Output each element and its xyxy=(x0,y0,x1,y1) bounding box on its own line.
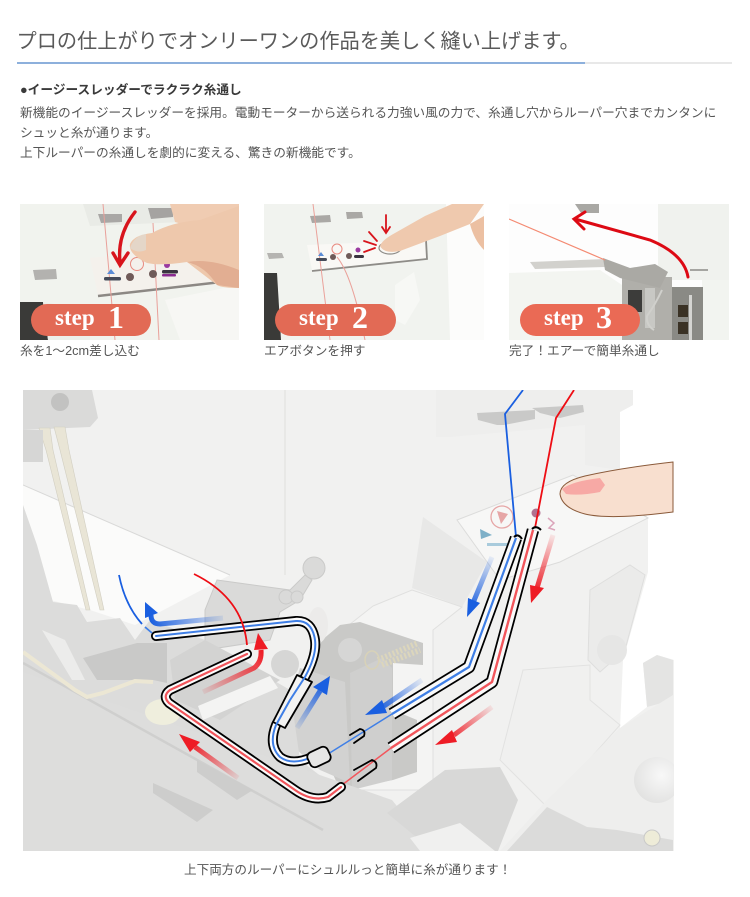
white housing xyxy=(330,590,462,790)
hand xyxy=(380,204,484,252)
flow arrows xyxy=(145,535,553,778)
lower right casting xyxy=(643,655,673,707)
red press marks xyxy=(364,215,390,252)
lower casting xyxy=(387,767,518,851)
photo: step 3 xyxy=(509,204,729,340)
intro body text: 新機能のイージースレッダーを採用。電動モーターから送られる力強い風の力で、糸通し穴からルーパー穴までカンタンに xyxy=(20,106,716,120)
step 2 badge: 2 xyxy=(352,299,368,335)
intro body text: 上下ルーパーの糸通しを劇的に変える、驚きの新機能です。 xyxy=(20,146,361,160)
step 3 badge: step xyxy=(544,305,584,330)
step 1 badge: 1 xyxy=(108,299,124,335)
step 3 badge xyxy=(520,299,640,336)
recess xyxy=(300,622,423,790)
mechanism arm xyxy=(205,557,325,650)
lever plates xyxy=(290,668,350,783)
step 1 badge: step xyxy=(55,305,95,330)
plate icons xyxy=(480,506,555,546)
intro text block xyxy=(20,82,716,160)
finger xyxy=(560,462,673,517)
red arrow xyxy=(574,212,688,277)
caption step 3: 完了！エアーで簡単糸通し xyxy=(509,344,660,358)
needles xyxy=(23,390,104,610)
foot and bed xyxy=(23,505,433,851)
diagram caption: 上下両方のルーパーにシュルルっと簡単に糸が通ります！ xyxy=(184,863,511,877)
caption step 1: 糸を1～2cm差し込む xyxy=(20,344,140,358)
spring xyxy=(378,643,420,665)
thread guide block xyxy=(436,390,633,470)
red tube right xyxy=(391,527,541,748)
white top plate xyxy=(457,475,648,580)
step 3 badge: 3 xyxy=(596,299,612,335)
step 1 badge xyxy=(31,299,151,336)
blue tube right xyxy=(392,535,522,714)
exit threads xyxy=(119,574,247,645)
lever xyxy=(588,565,645,672)
blue tube left xyxy=(156,621,332,769)
title: プロの仕上がりでオンリーワンの作品を美しく縫い上げます。 xyxy=(16,31,580,53)
upper threads xyxy=(505,390,574,537)
step 2 badge: step xyxy=(299,305,339,330)
title underline xyxy=(17,62,732,64)
photo: step 1 xyxy=(20,204,239,340)
intro heading: ●イージースレッダーでラクラク糸通し xyxy=(20,83,242,97)
machine background xyxy=(23,390,680,851)
tube stubs xyxy=(350,729,376,781)
intro body text: シュッと糸が通ります。 xyxy=(20,126,158,140)
caption step 2: エアボタンを押す xyxy=(264,344,366,358)
hand xyxy=(130,204,239,288)
connecting threads xyxy=(328,714,392,785)
threading diagram xyxy=(23,390,674,851)
photo: step 2 xyxy=(264,204,484,340)
intro body text xyxy=(20,106,716,160)
red tube left xyxy=(166,654,341,798)
red arrow xyxy=(113,212,135,265)
step 2 badge xyxy=(275,299,396,336)
